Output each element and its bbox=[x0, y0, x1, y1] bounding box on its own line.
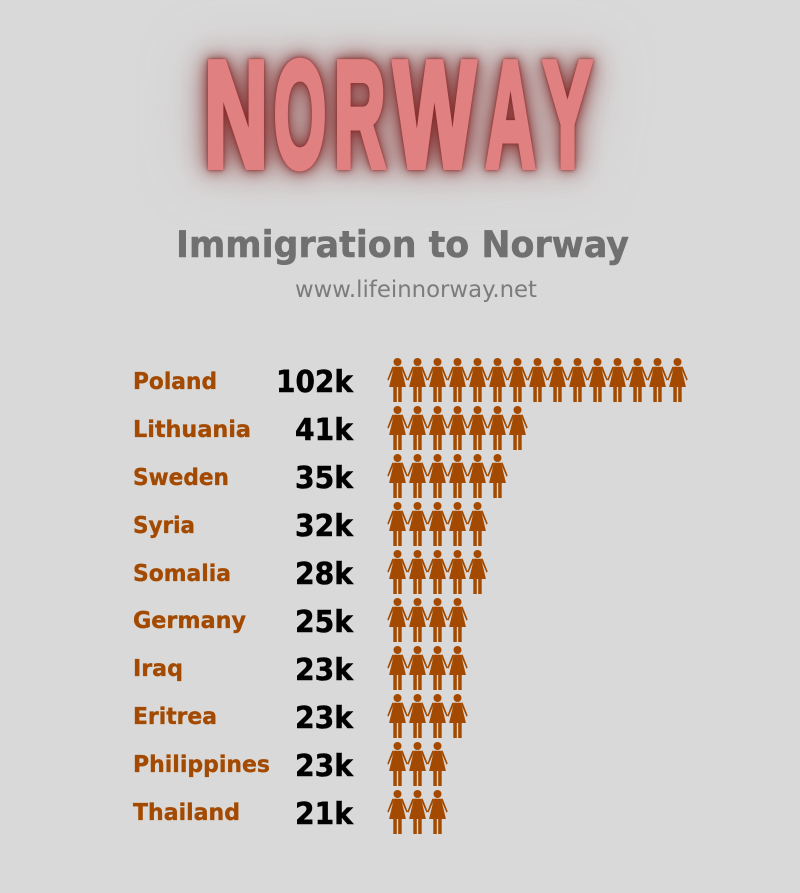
row: Sweden bbox=[133, 454, 508, 498]
row: Philippines bbox=[133, 742, 448, 786]
row: Eritrea: 23k bbox=[295, 701, 354, 736]
row: Somalia bbox=[133, 550, 488, 594]
row: Eritrea: Eritrea bbox=[133, 704, 217, 730]
row: Germany: 25k bbox=[295, 605, 354, 640]
subtitle: Immigration to Norway bbox=[176, 223, 629, 266]
row: Somalia: Somalia bbox=[133, 561, 231, 587]
title: NORWAY: A bbox=[486, 30, 535, 199]
row: Thailand bbox=[133, 790, 448, 834]
title: NORWAY: R bbox=[334, 31, 385, 200]
row: Thailand: 21k bbox=[295, 797, 354, 832]
row: Poland: Poland bbox=[133, 369, 217, 395]
row: Germany bbox=[133, 598, 468, 642]
title: NORWAY bbox=[204, 30, 592, 200]
row: Syria bbox=[133, 502, 488, 546]
row: Poland: 102k bbox=[276, 365, 354, 400]
source url: www.lifeinnorway.net bbox=[295, 277, 537, 303]
row: Iraq: Iraq bbox=[133, 656, 183, 682]
row: Thailand: Thailand bbox=[133, 800, 240, 826]
row: Lithuania bbox=[133, 406, 528, 450]
row: Philippines: Philippines bbox=[133, 752, 270, 778]
chart: immigrants by country bbox=[133, 358, 688, 834]
row: Iraq: 23k bbox=[295, 653, 354, 688]
row: Philippines: 23k bbox=[295, 749, 354, 784]
row: Germany: Germany bbox=[133, 608, 246, 634]
row: Poland bbox=[133, 358, 688, 402]
row: Syria: Syria bbox=[133, 513, 195, 539]
row: Syria: 32k bbox=[295, 509, 354, 544]
row: Eritrea bbox=[133, 694, 468, 738]
row: Lithuania: Lithuania bbox=[133, 417, 251, 443]
row: Lithuania: 41k bbox=[295, 413, 354, 448]
title: NORWAY: N bbox=[204, 31, 268, 199]
row: Iraq bbox=[133, 646, 468, 690]
row: Sweden: Sweden bbox=[133, 465, 229, 491]
row: Somalia: 28k bbox=[295, 557, 354, 592]
title: NORWAY: Y bbox=[543, 30, 592, 200]
row: Sweden: 35k bbox=[295, 461, 354, 496]
title: NORWAY: W bbox=[394, 32, 476, 200]
title: NORWAY: O bbox=[274, 30, 326, 199]
